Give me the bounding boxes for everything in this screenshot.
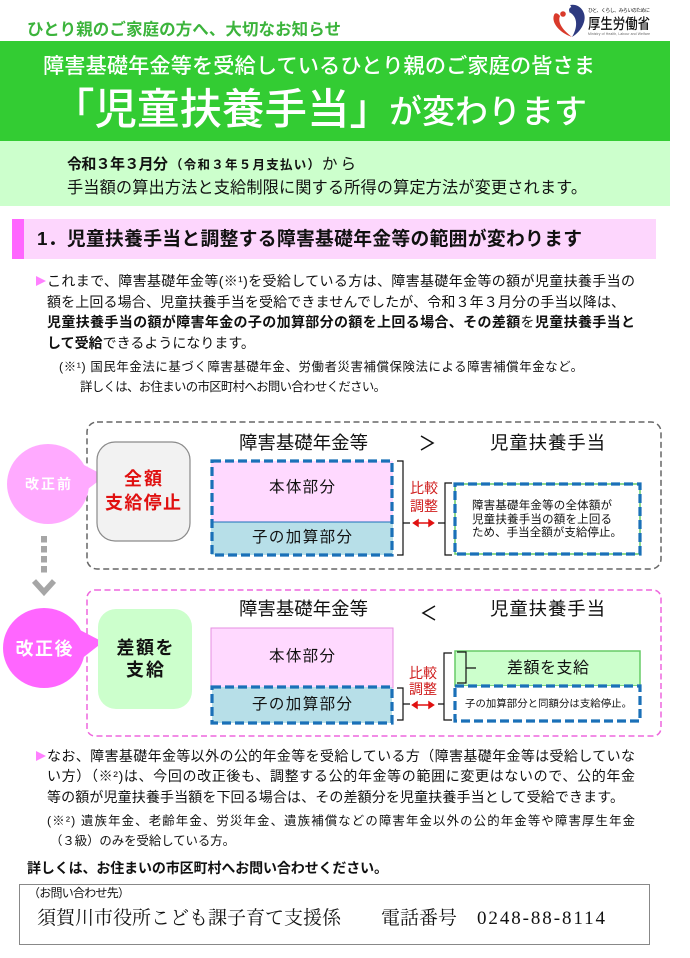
logo: ministry	[553, 5, 650, 37]
footnote 2: （３級）のみを受給している方。	[50, 833, 235, 848]
pension stacked block: 本体部分	[269, 478, 335, 496]
section heading bar	[12, 219, 656, 259]
full stop box: 支給停止	[105, 493, 181, 513]
contact box: 須賀川市役所こども課子育て支援係	[37, 907, 342, 929]
logo: ministry: ひと、くらし、みらいのために	[588, 8, 650, 14]
contact box: 0248-88-8114	[477, 908, 606, 929]
footnote 1	[59, 359, 583, 394]
pension stacked block: 子の加算部分	[252, 527, 352, 546]
logo: ministry: Ministry of Health, Labour and Welfare	[588, 32, 650, 36]
logo: ministry: 厚生労働省	[588, 16, 650, 33]
compare bracket and arrow: 調整	[409, 681, 437, 697]
footnote 2: (※²) 遺族年金、老齢年金、労災年金、遺族補償などの障害年金以外の公的年金等や障害厚生年金	[47, 813, 635, 828]
comparison header: 障害基礎年金等	[239, 598, 368, 619]
body paragraph 2: 等の額が児童扶養手当額を下回る場合は、その差額分を児童扶養手当として受給できます。	[47, 789, 624, 805]
effective date line: （令和３年５月支払い）	[170, 157, 320, 172]
body paragraph 1: これまで、障害基礎年金等(※¹)を受給している方は、障害基礎年金等の額が児童扶養手当の	[47, 273, 635, 289]
footnote 1: 詳しくは、お住まいの市区町村へお問い合わせください。	[80, 379, 386, 394]
comparison header	[239, 432, 605, 453]
body paragraph 1: 額を上回る場合、児童扶養手当を受給できませんでしたが、令和３年３月分の手当以降は、	[47, 294, 625, 310]
comparison header: 障害基礎年金等	[239, 432, 368, 453]
allowance box	[455, 484, 640, 554]
compare bracket and arrow	[397, 653, 452, 720]
panel: green title banner	[0, 41, 670, 141]
full stop box	[97, 442, 190, 541]
compare bracket and arrow: 比較	[409, 665, 437, 681]
full stop box: 全額	[124, 469, 162, 489]
section heading bar: 1．児童扶養手当と調整する障害基礎年金等の範囲が変わります	[37, 227, 582, 249]
banner subtitle: 障害基礎年金等を受給しているひとり親のご家庭の皆さま	[43, 54, 595, 78]
panel: light green effective date	[0, 141, 670, 206]
before badge	[7, 444, 105, 524]
pension stacked block	[211, 628, 393, 723]
allowance box: 児童扶養手当の額を上回る	[472, 512, 612, 526]
panel: before revision	[7, 422, 661, 569]
compare bracket and arrow	[397, 461, 452, 555]
body paragraph 2: なお、障害基礎年金等以外の公的年金等を受給している方（障害基礎年金等は受給していな	[47, 748, 635, 764]
allowance box: ため、手当全額が支給停止。	[472, 525, 622, 539]
contact box: （お問い合わせ先）	[28, 886, 130, 900]
effective date line: から	[322, 156, 356, 173]
comparison header: 児童扶養手当	[490, 598, 605, 619]
pension stacked block	[211, 461, 393, 555]
contact box: 電話番号	[381, 907, 457, 929]
compare bracket and arrow: 比較	[410, 480, 438, 496]
allowance box: 障害基礎年金等の全体額が	[472, 498, 612, 512]
difference paid box: 支給	[126, 660, 164, 680]
contact prompt: 詳しくは、お住まいの市区町村へお問い合わせください。	[27, 860, 388, 876]
change description: 手当額の算出方法と支給制限に関する所得の算定方法が変更されます。	[67, 178, 587, 197]
comparison header: 児童扶養手当	[490, 432, 605, 453]
pension stacked block: 子の加算部分	[252, 694, 352, 713]
banner main title: 「児童扶養手当」	[52, 87, 392, 134]
effective date line	[67, 155, 356, 173]
panel: after revision	[3, 590, 661, 736]
difference segment	[455, 651, 640, 686]
before badge: 改正前	[25, 476, 71, 492]
after badge	[3, 608, 103, 688]
compare bracket and arrow: 調整	[410, 498, 438, 514]
difference paid box	[98, 609, 192, 709]
banner main title: が変わります	[389, 93, 587, 130]
difference paid box: 差額を	[116, 638, 174, 658]
difference segment: 差額を支給	[507, 659, 589, 677]
after badge: 改正後	[16, 639, 72, 659]
top notice heading: ひとり親のご家庭の方へ、大切なお知らせ	[27, 19, 341, 39]
body paragraph 1: 児童扶養手当の額が障害年金の子の加算部分の額を上回る場合、その差額を児童扶養手当と	[47, 314, 635, 330]
comparison header	[239, 598, 605, 620]
contact box	[20, 884, 650, 944]
footnote 2	[47, 813, 635, 848]
arrow: before to after	[34, 536, 54, 592]
body paragraph 2	[36, 748, 635, 805]
body paragraph 1: して受給できるようになります。	[47, 335, 255, 351]
effective date line: 令和３年３月分	[67, 155, 168, 173]
footnote 1: (※¹) 国民年金法に基づく障害基礎年金、労働者災害補償保険法による障害補償年金など。	[59, 359, 583, 374]
body paragraph 2: い方）（※²)は、今回の改正後も、調整する公的年金等の範囲に変更はないので、公的年金	[47, 768, 635, 784]
pension stacked block: 本体部分	[269, 647, 335, 665]
banner main title	[52, 87, 587, 134]
stopped segment: 子の加算部分と同額分は支給停止。	[465, 697, 632, 710]
body paragraph 1	[36, 273, 635, 351]
stopped segment	[455, 686, 640, 721]
